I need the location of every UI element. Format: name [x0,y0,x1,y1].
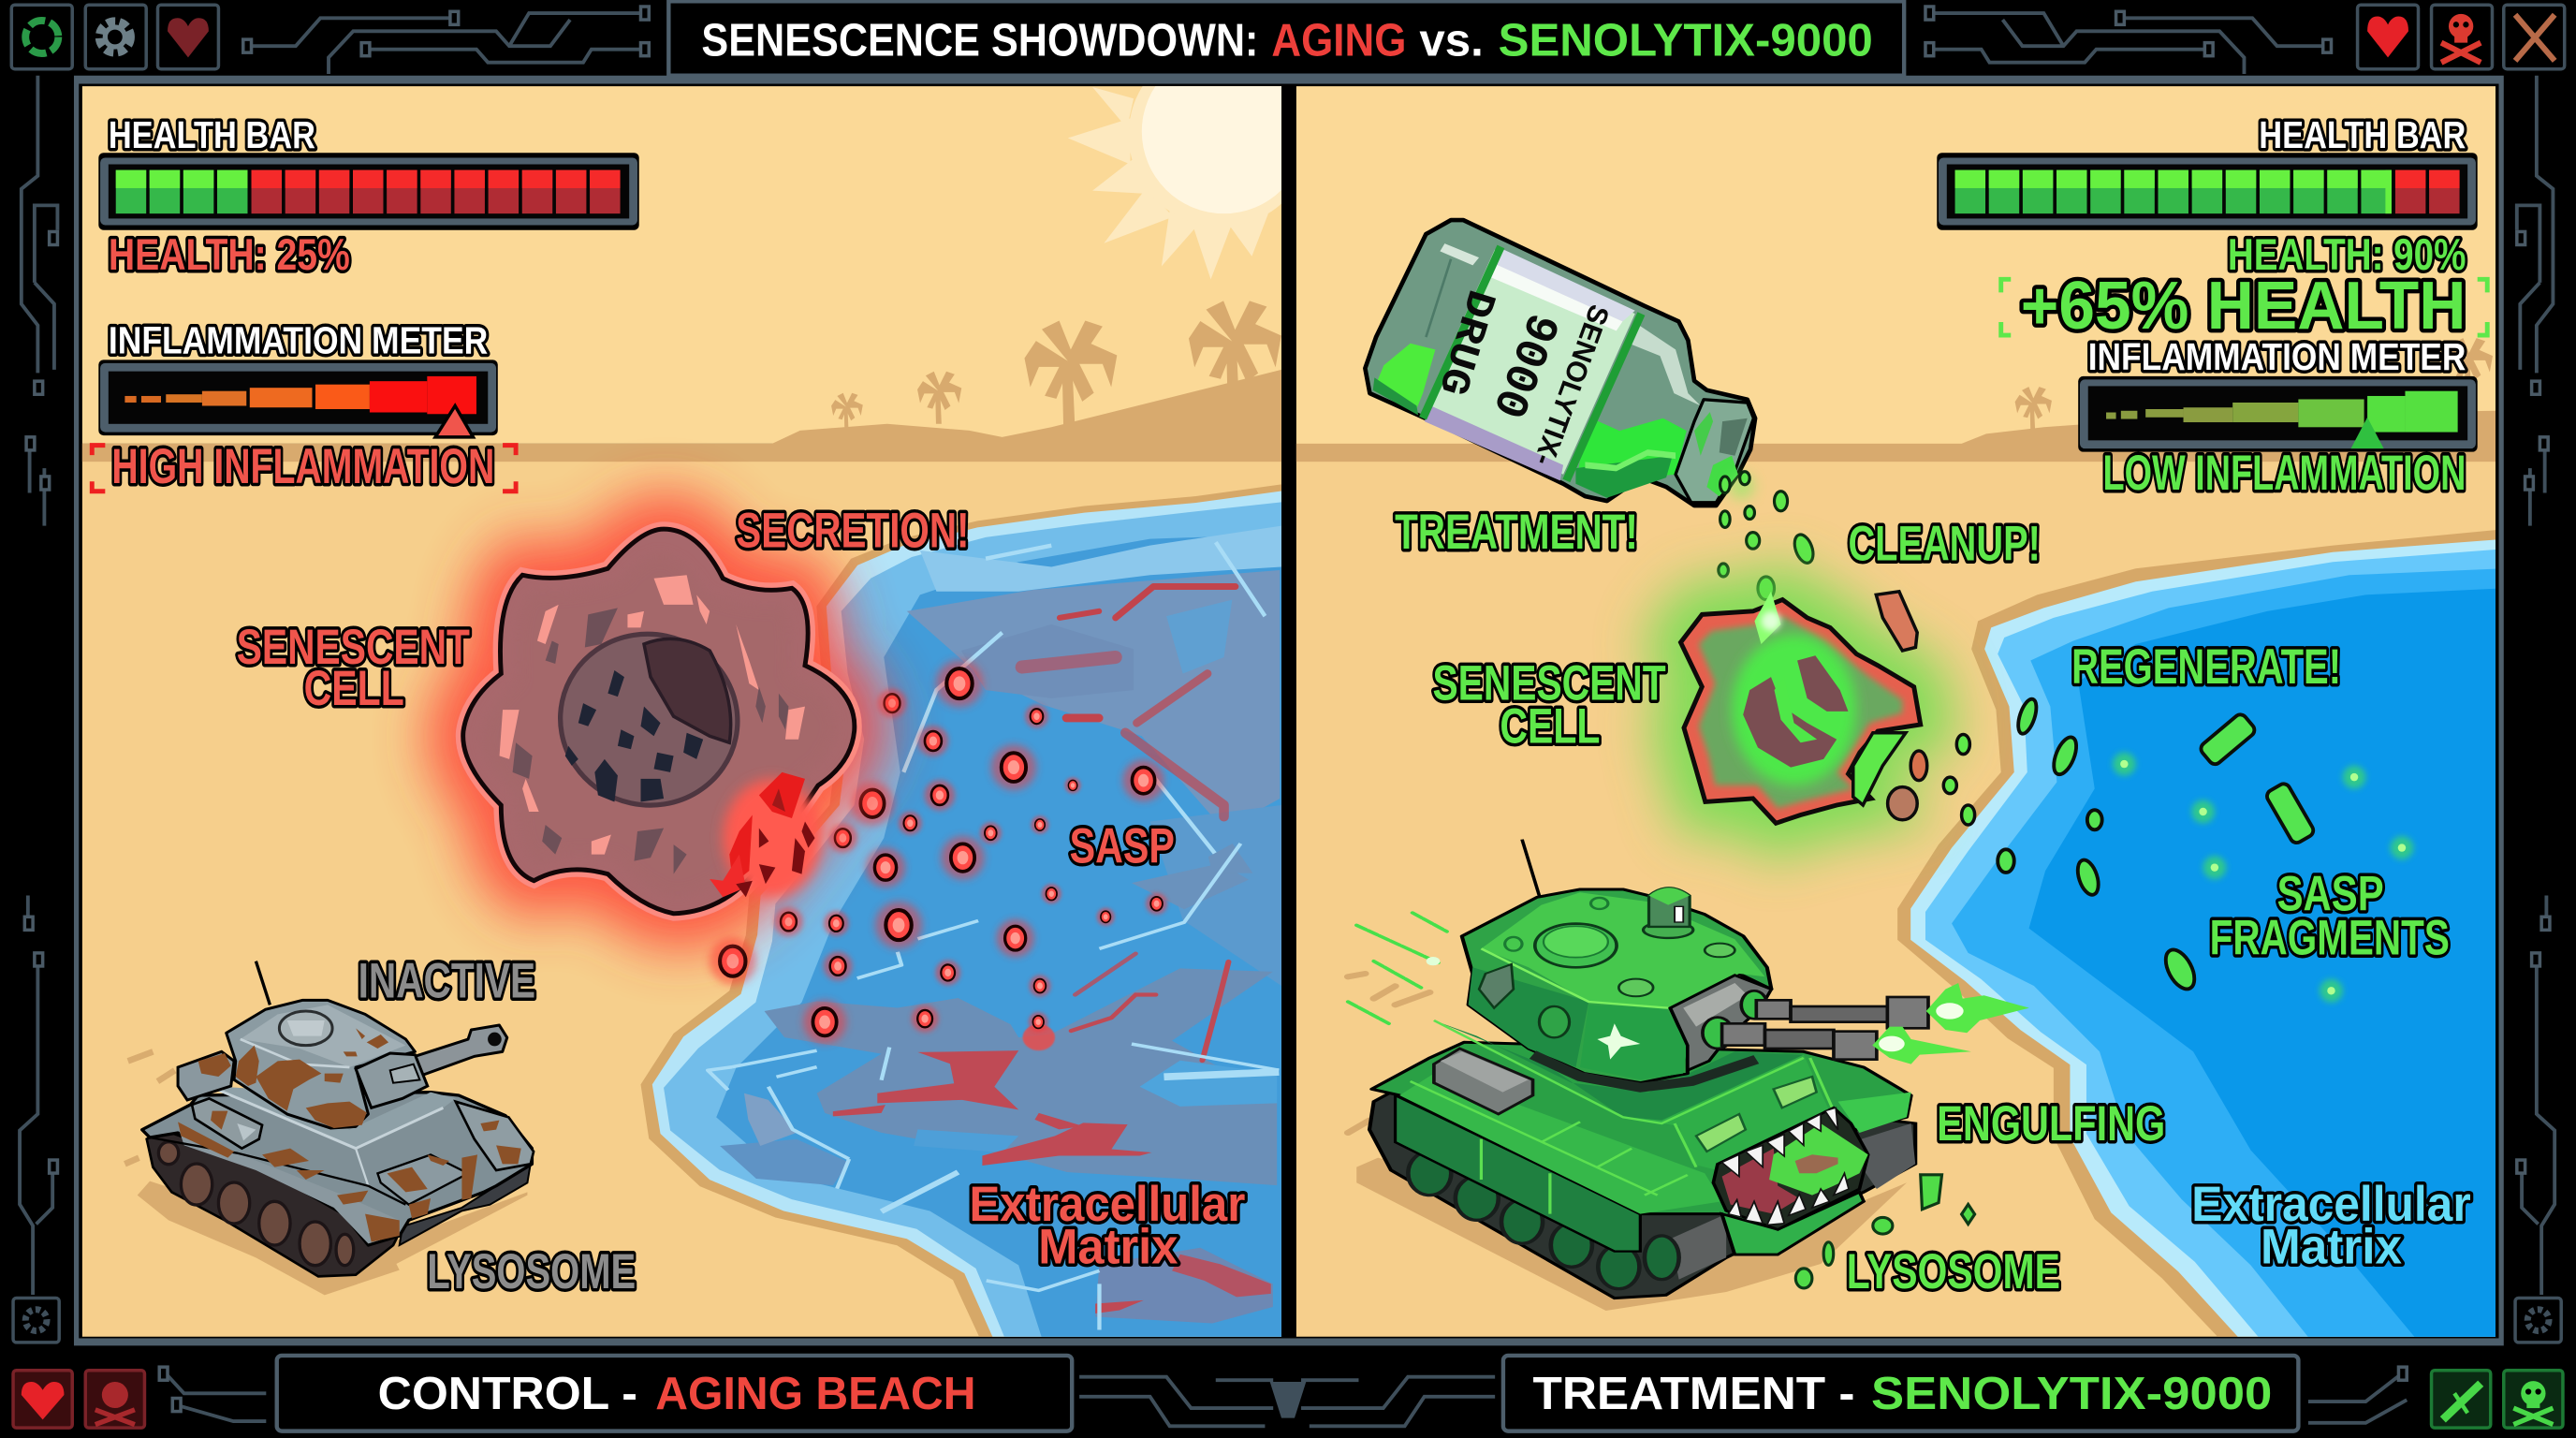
label: extracellular matrix [970,1181,1248,1268]
panel: treatment senolytix beach [1296,85,2506,1347]
label: secretion: SECRETION! [736,503,970,558]
center triangle marker [1270,1382,1306,1418]
label: extracellular matrix: Extracellular [970,1177,1245,1232]
drug bottle pouring [1365,220,1755,506]
label: senescent cell [235,625,472,709]
control health bar HUD [92,113,639,494]
palm tree and hill [1962,338,2496,447]
top-right icons [2358,5,2565,69]
icon: heart [2358,5,2419,69]
label: SASP fragments [2210,866,2450,966]
icon: syringe [2432,1371,2491,1428]
bottle neck [1676,400,1753,503]
label: senescent cell: CELL [1500,698,1600,754]
twin cannons [1703,990,1928,1060]
turret [227,961,507,1128]
label: senescent cell: CELL [304,661,404,716]
label: extracellular matrix: Matrix [2261,1220,2402,1275]
label: lysosome: LYSOSOME [1847,1244,2060,1299]
green liquid [1575,418,1687,496]
title banner [668,0,1904,76]
label: SASP fragments: FRAGMENTS [2210,911,2450,966]
nucleus fragments [1743,655,1848,768]
label: inactive: INACTIVE [359,953,535,1008]
footer: treatment senolytix: SENOLYTIX-9000 [1871,1369,2272,1419]
footer: control beach: AGING BEACH [655,1369,976,1419]
label: extracellular matrix: Extracellular [2191,1177,2471,1232]
icon: green skull [2504,1371,2563,1428]
label: SASP fragments: SASP [2277,866,2384,921]
SASP particles [710,660,1167,1044]
title banner: vs. [1419,16,1484,66]
label: extracellular matrix [2191,1177,2471,1275]
right panel and fender [377,1154,468,1205]
senescent cell with red glow [463,529,855,914]
footer: treatment senolytix: TREATMENT - [1533,1369,1855,1419]
SASP fragments in water [1998,697,2316,993]
label: health 25: HEALTH: 25% [109,230,350,280]
green drips [1719,472,1817,600]
icon: skull and crossbones [2432,5,2492,69]
top-left icons [11,5,218,69]
label: lysosome: LYSOSOME [427,1244,636,1299]
label: engulfing: ENGULFING [1937,1096,2165,1152]
antenna [1522,840,1539,896]
label: extracellular matrix: Matrix [1038,1220,1178,1275]
armor box [1434,1049,1533,1114]
drug bottle pouring: DRUG [1427,284,1502,401]
label: treatment: TREATMENT! [1395,505,1638,560]
label: regenerate: REGENERATE! [2071,639,2341,695]
callout: plus 65 percent health: +65% HEALTH [2021,269,2466,344]
title banner: SENOLYTIX-9000 [1499,16,1873,66]
pointer [435,405,473,437]
label: senescent cell [1432,656,1666,754]
damaged red streaks [833,1050,1271,1313]
secretion burst [710,772,822,897]
circuit traces bottom [159,1367,2407,1426]
front fender [178,1051,234,1100]
icon: heart [13,1371,72,1428]
gray inactive tank lysosome [124,961,534,1295]
raised front panel [192,1098,262,1149]
pointer [2351,418,2384,448]
dissolving senescent cell [1680,592,1975,825]
bar: health 90 percent [1937,153,2478,230]
scenario labels: control [237,503,1245,1299]
background: sky and sand [82,85,1283,1338]
lower water patches and streaks [708,844,1279,1330]
footer: control beach [277,1356,1072,1431]
nucleus [558,631,739,808]
icon: gear [85,5,146,69]
foam lines [708,844,1279,1330]
icon: gear left frame [13,1298,59,1343]
label: senescent cell: SENESCENT [1432,656,1666,712]
ocean water with damaged matrix [640,483,1292,1347]
bottom-left icons [13,1371,144,1428]
ocean water clean blue [1897,529,2506,1347]
tank tracks and wheels [147,1130,531,1276]
panel: control aging beach [82,43,1312,1347]
label: SASP: SASP [1070,818,1175,873]
rust patches [178,1121,521,1242]
label: senescent cell: SENESCENT [237,620,470,675]
meter: low inflammation [2078,376,2478,452]
label: inflammation meter: INFLAMMATION METER [2088,335,2466,378]
tank hull [1396,1095,1640,1252]
sparkles [2113,753,2413,1003]
icon: crossed swords [2504,5,2565,69]
drug bottle pouring: 9000 [1481,305,1568,425]
bottle rear glass [1440,243,1479,265]
green active tank lysosome [1348,840,2029,1311]
bottle shoulder [1629,325,1701,405]
label: health bar: HEALTH BAR [2259,113,2466,156]
bottle label text: SENOLYTIX- [1528,301,1615,470]
tank hull [142,1093,532,1245]
label: health 90: HEALTH: 90% [2228,230,2466,280]
palm trees and hills [772,301,1281,447]
footer: control beach: CONTROL - [378,1369,637,1419]
muzzle flashes [1872,983,2029,1064]
scenario labels: treatment [1395,505,2471,1299]
tank turret [1462,888,1771,1088]
bar: health 25 percent [98,153,639,230]
title banner: SENESCENCE SHOWDOWN: [701,16,1258,66]
spat-out debris [1795,1175,1975,1288]
motion streaks [1348,913,1447,1133]
bottle label [1423,250,1635,475]
monster mouth [1713,1108,1868,1255]
meter: high inflammation [98,360,498,437]
cell debris [1853,592,1975,825]
bottom-right icons [2432,1371,2563,1428]
sun [1068,86,1281,279]
label: health bar: HEALTH BAR [109,113,315,156]
background: sky and sand [1296,85,2497,1338]
circuit traces top [243,7,2331,74]
footer: treatment senolytix [1503,1356,2298,1431]
label: cleanup: CLEANUP! [1848,516,2041,571]
tank tracks [1369,1093,1915,1299]
upper water patches and streaks [903,526,1281,986]
label: inflammation meter: INFLAMMATION METER [109,318,488,361]
cell inclusions [500,575,805,855]
treatment health bar HUD [1937,113,2487,501]
icon: dim heart [157,5,218,69]
icon: gear right frame [2515,1298,2561,1343]
icon: recycle [11,5,72,69]
title banner: AGING [1271,16,1406,66]
callout: high inflammation: HIGH INFLAMMATION [111,439,494,494]
icon: dark skull [85,1371,144,1428]
